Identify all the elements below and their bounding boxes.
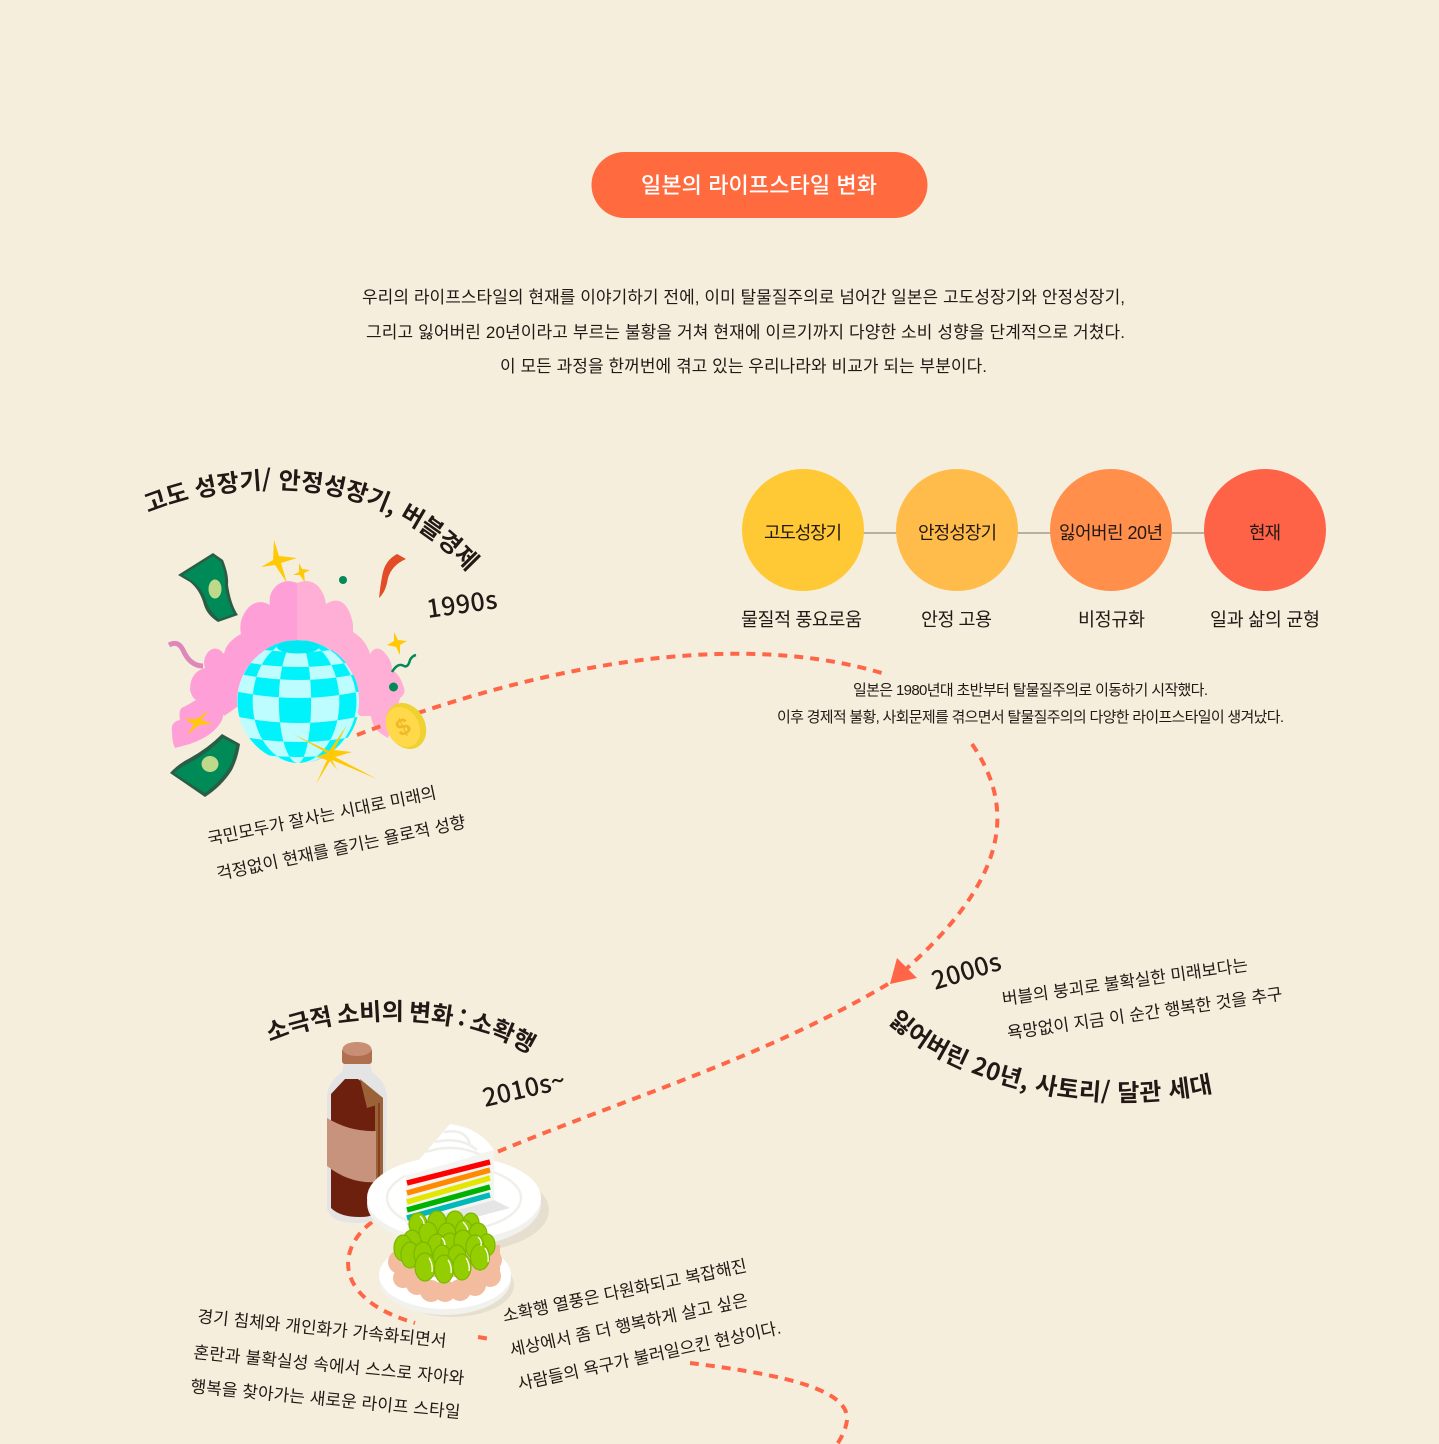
dashed path 1: from coin to explanation [357, 654, 885, 735]
description: lost consumers: 경기 침체와 개인화가 가속화되면서 [197, 1307, 447, 1351]
description: small happiness [501, 1256, 783, 1394]
intro text: 그리고 잃어버린 20년이라고 부르는 불황을 거쳐 현재에 이르기까지 다양한 소비 성향을 단계적으로 거쳤다. [366, 323, 1125, 342]
timeline of four consumption stages [741, 469, 1326, 630]
icon: rainbow cake [405, 1124, 510, 1232]
dashed path 2: with arrow to 2000s [490, 744, 997, 1155]
icon: pink brain right [297, 581, 404, 738]
explanation text [777, 682, 1284, 726]
description: lost consumers: 행복을 찾아가는 새로운 라이프 스타일 [190, 1377, 461, 1422]
icon: bottom banknote [170, 734, 240, 797]
icon: sparkle top small [293, 563, 310, 583]
title pill [592, 152, 928, 218]
intro text [362, 288, 1125, 376]
stage: lost 20 years: 비정규화 [1078, 609, 1145, 630]
icon: gold coin [378, 696, 434, 756]
dashed path 3 [490, 984, 888, 1155]
heading: 2000s era: 잃어버린 20년, 사토리/ 달관 세대 [889, 1010, 1212, 1104]
year label 2010s: 2010s~ [479, 1061, 569, 1115]
title pill: 일본의 라이프스타일 변화 [641, 168, 877, 200]
description: 1990s: 국민모두가 잘사는 시대로 미래의 [206, 783, 438, 849]
dashed path 6: continuing off page [690, 1363, 847, 1444]
icon: sparkle top large [261, 540, 297, 583]
description: 1990s [206, 783, 467, 884]
icon: green dot right [389, 682, 398, 692]
stage: high growth: 고도성장기 [764, 523, 842, 543]
heading: 1990s era: 고도 성장기/ 안정성장기, 버블경제 [144, 468, 481, 572]
explanation text: 일본은 1980년대 초반부터 탈물질주의로 이동하기 시작했다. [853, 682, 1208, 699]
description: 2000s: 버블의 붕괴로 불확실한 미래보다는 [1001, 956, 1249, 1009]
icon: green ribbon [392, 655, 416, 672]
description: small happiness: 사람들의 욕구가 불러일으킨 현상이다. [516, 1318, 783, 1394]
intro text: 우리의 라이프스타일의 현재를 이야기하기 전에, 이미 탈물질주의로 넘어간 일본은 고도성장기와 안정성장기, [362, 288, 1125, 307]
icon: gold coin: $ [391, 712, 416, 743]
year label 2000s: 2000s [927, 942, 1005, 998]
icon: grape tart [379, 1211, 514, 1317]
description: 2000s: 욕망없이 지금 이 순간 행복한 것을 추구 [1006, 985, 1284, 1043]
stage: lost 20 years: 잃어버린 20년 [1059, 523, 1163, 543]
icon: pink ribbon [169, 643, 203, 666]
description: small happiness: 세상에서 좀 더 행복하게 살고 싶은 [508, 1291, 750, 1360]
arrow head [890, 958, 917, 984]
stage: lost 20 years [1050, 469, 1172, 630]
stage: stable growth: 안정 고용 [921, 609, 992, 630]
icon: cake plate [367, 1156, 549, 1252]
icon: sparkle right [387, 632, 407, 655]
stage: high growth: 물질적 풍요로움 [741, 609, 862, 630]
illustration: brain and disco ball [169, 540, 885, 797]
description: lost consumers: 혼란과 불확실성 속에서 스스로 자아와 [193, 1343, 466, 1388]
stage: present: 일과 삶의 균형 [1210, 609, 1320, 630]
icon: green dot top [339, 576, 347, 584]
year label 1990s: 1990s [424, 580, 499, 626]
description: small happiness: 소확행 열풍은 다원화되고 복잡해진 [501, 1256, 749, 1326]
icon: top banknote [178, 553, 238, 622]
stage: present: 현재 [1249, 523, 1281, 543]
stage: stable growth: 안정성장기 [918, 523, 997, 543]
icon: sparkle left [184, 710, 213, 735]
icon: large sparkle [293, 725, 377, 784]
explanation text: 이후 경제적 불황, 사회문제를 겪으면서 탈물질주의의 다양한 라이프스타일이 생겨났다. [777, 709, 1284, 726]
stage: present [1204, 469, 1326, 630]
stage: high growth [741, 469, 864, 630]
icon: orange ribbon [379, 554, 406, 598]
icon: bottle [327, 1042, 387, 1223]
icon: pink brain left [172, 581, 297, 748]
heading: 2010s era: 소극적 소비의 변화 : 소확행 [268, 1000, 538, 1053]
stage: stable growth [896, 469, 1018, 630]
dashed path 5: short segment [478, 1337, 490, 1339]
description: lost consumers [190, 1307, 466, 1422]
illustration: bottle and desserts [327, 1042, 549, 1323]
icon: disco ball [237, 640, 359, 763]
description: 2000s [1001, 956, 1284, 1043]
dashed path 4 [348, 1222, 415, 1323]
intro text: 이 모든 과정을 한꺼번에 겪고 있는 우리나라와 비교가 되는 부분이다. [500, 357, 987, 376]
description: 1990s: 걱정없이 현재를 즐기는 욜로적 성향 [215, 813, 467, 884]
